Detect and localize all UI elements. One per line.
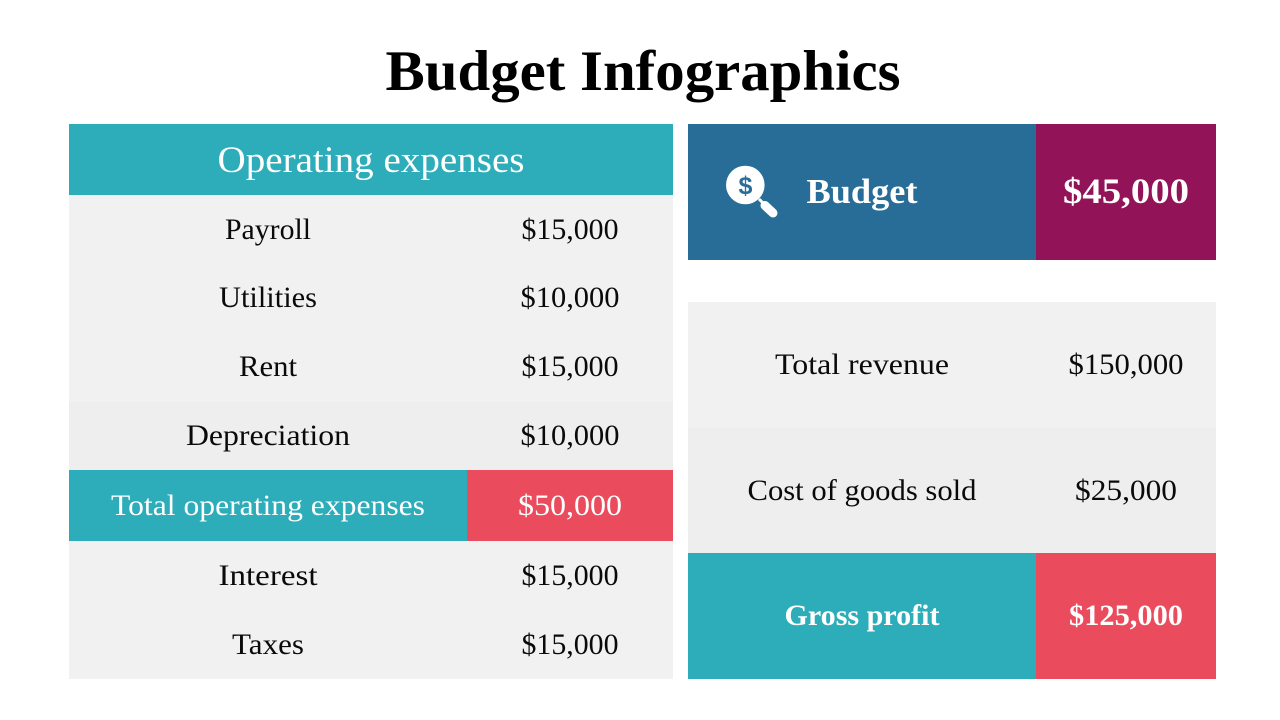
row: interest: Interest (218, 559, 318, 592)
row: depreciation: Depreciation (186, 419, 350, 452)
panel: profit summary (688, 302, 1216, 679)
icon: magnifier with dollar sign: $ (739, 172, 753, 200)
row: total revenue (688, 302, 1216, 428)
row: payroll (225, 213, 618, 246)
depreciation row background (69, 402, 673, 470)
row: depreciation (186, 419, 620, 452)
row: rent: Rent (239, 350, 298, 383)
row: cost of goods sold (688, 428, 1216, 553)
budget amount (1036, 124, 1216, 260)
row: utilities: $10,000 (520, 281, 620, 314)
row: total operating expenses: Total operating expenses (111, 489, 425, 522)
panel: budget (688, 124, 1216, 260)
operating expenses heading: Operating expenses (218, 140, 524, 181)
row: payroll: $15,000 (522, 213, 618, 246)
row: total operating expenses: $50,000 (518, 489, 622, 522)
row: total operating expenses (69, 470, 673, 541)
row: taxes: $15,000 (522, 628, 618, 661)
row: depreciation: $10,000 (520, 419, 620, 452)
row: total revenue: $150,000 (1068, 348, 1184, 381)
row: gross profit: $125,000 (1069, 599, 1183, 632)
row: interest (218, 559, 618, 592)
panel: operating expenses (69, 124, 673, 679)
row: utilities: Utilities (219, 281, 317, 314)
row: cost of goods sold: $25,000 (1075, 474, 1177, 507)
row: taxes: Taxes (232, 628, 304, 661)
row: utilities (219, 281, 620, 314)
row: rent: $15,000 (522, 350, 618, 383)
icon: magnifier with dollar sign (726, 166, 773, 213)
operating expenses heading (69, 124, 673, 195)
row: interest: $15,000 (522, 559, 618, 592)
row: gross profit (688, 553, 1216, 679)
row: taxes (232, 628, 618, 661)
row: cost of goods sold: Cost of goods sold (748, 474, 976, 507)
row: total revenue: Total revenue (775, 348, 949, 381)
row: payroll: Payroll (225, 213, 311, 246)
operating expenses table background (69, 195, 673, 679)
title: Budget Infographics (386, 40, 900, 103)
budget label block (688, 124, 1036, 260)
budget label: Budget (806, 172, 918, 211)
budget amount: $45,000 (1063, 171, 1189, 211)
row: rent (239, 350, 618, 383)
row: gross profit: Gross profit (784, 599, 940, 632)
